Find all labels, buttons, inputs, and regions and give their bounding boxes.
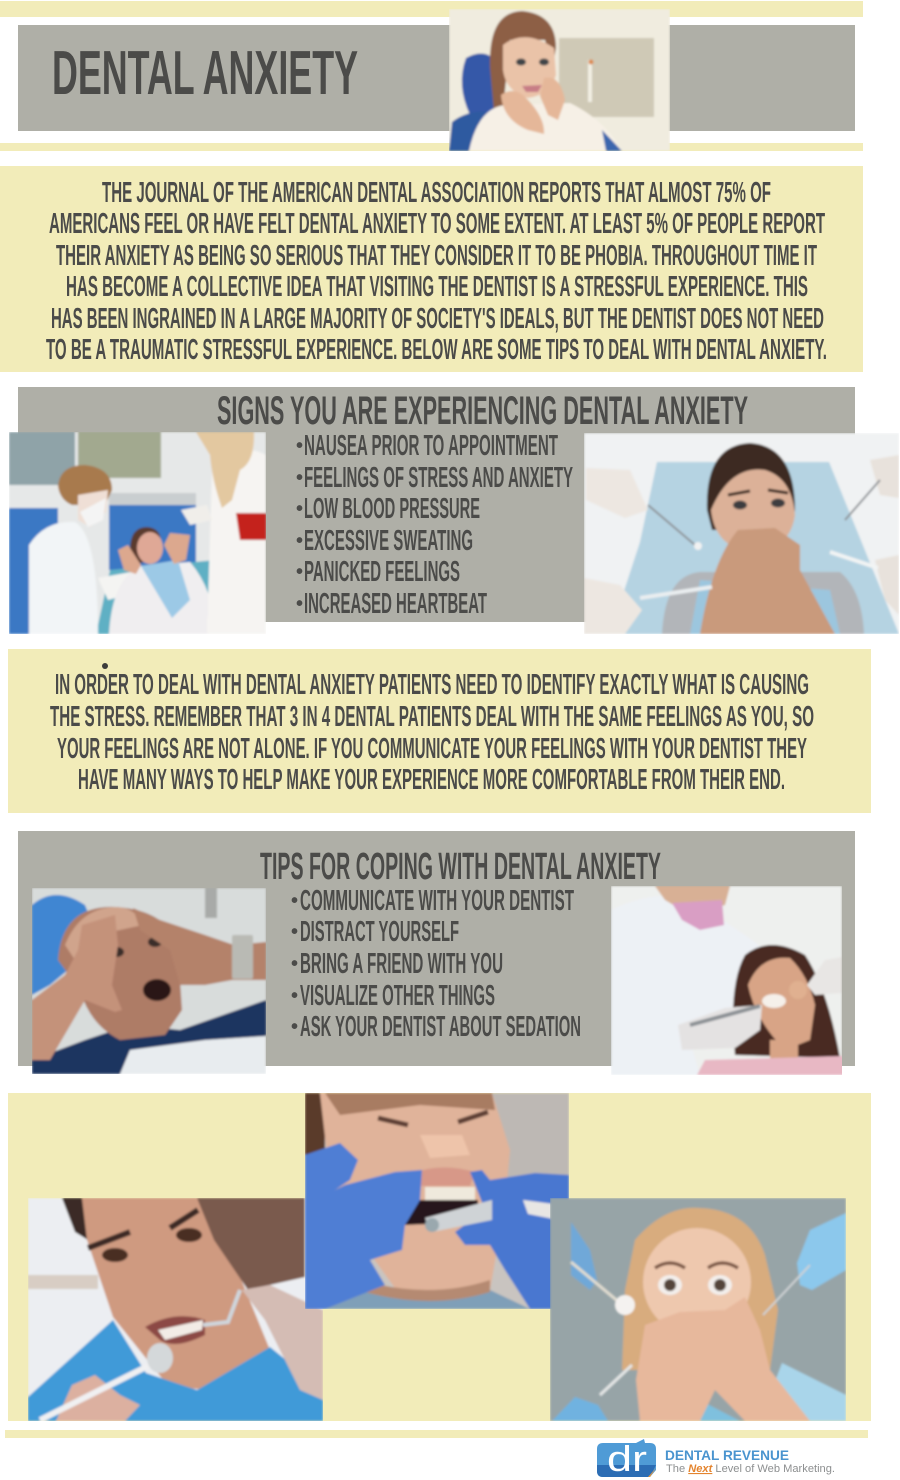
lower header yellow bar: [0, 143, 863, 151]
header panel: [18, 25, 855, 131]
signs list: [296, 430, 573, 620]
photo: woman covering mouth with hands: [584, 433, 899, 634]
signs list: •: [296, 593, 303, 615]
tips list: •: [291, 890, 298, 912]
intro panel: [0, 166, 863, 372]
tips list: COMMUNICATE WITH YOUR DENTIST: [300, 885, 574, 917]
title: DENTAL ANXIETY: [52, 39, 358, 108]
tips list: •: [291, 921, 298, 943]
signs list: •: [296, 467, 303, 489]
panel: photo collage: [8, 1093, 871, 1421]
signs list: NAUSEA PRIOR TO APPOINTMENT: [304, 430, 558, 462]
photo: anxious young woman in dental chair: [449, 9, 670, 151]
logo: Dental Revenue: [597, 1438, 835, 1479]
signs list: PANICKED FEELINGS: [304, 556, 460, 588]
tips list: VISUALIZE OTHER THINGS: [300, 980, 495, 1012]
tips list: •: [291, 1016, 298, 1038]
signs list: •: [296, 530, 303, 552]
photo: child's teeth being treated: [305, 1093, 569, 1309]
signs list: EXCESSIVE SWEATING: [304, 525, 473, 557]
photo: man with dental mirror: [28, 1198, 323, 1421]
panel: signs: [18, 387, 855, 622]
signs list: •: [296, 435, 303, 457]
photo: dentist and nurse with scared patient: [9, 432, 266, 634]
tips list: •: [291, 985, 298, 1007]
bottom yellow bar: [5, 1430, 868, 1438]
top yellow bar: [0, 1, 863, 17]
signs list: •: [296, 498, 303, 520]
tips list: [291, 885, 581, 1043]
panel: dealing with anxiety: [8, 649, 871, 813]
logo mark: dr: [607, 1438, 647, 1479]
signs list: INCREASED HEARTBEAT: [304, 588, 487, 620]
tips list: •: [291, 953, 298, 975]
logo name: DENTAL REVENUE: [665, 1447, 789, 1463]
panel: tips: [18, 831, 855, 1066]
signs list: •: [296, 561, 303, 583]
photo: bald man clutching head: [32, 888, 266, 1074]
logo tagline: The Next Level of Web Marketing.: [666, 1463, 835, 1475]
photo: smiling woman at dentist: [611, 886, 845, 1075]
signs list: LOW BLOOD PRESSURE: [304, 493, 480, 525]
signs list: FEELINGS OF STRESS AND ANXIETY: [304, 462, 573, 494]
tips list: ASK YOUR DENTIST ABOUT SEDATION: [300, 1011, 581, 1043]
photo: blonde woman covering mouth: [550, 1198, 846, 1421]
logo mark: [597, 1438, 656, 1479]
dealing text: [50, 669, 814, 796]
tips list: DISTRACT YOURSELF: [300, 916, 459, 948]
tips list: BRING A FRIEND WITH YOU: [300, 948, 503, 980]
intro text: [46, 177, 827, 366]
stray dot: [102, 663, 108, 669]
